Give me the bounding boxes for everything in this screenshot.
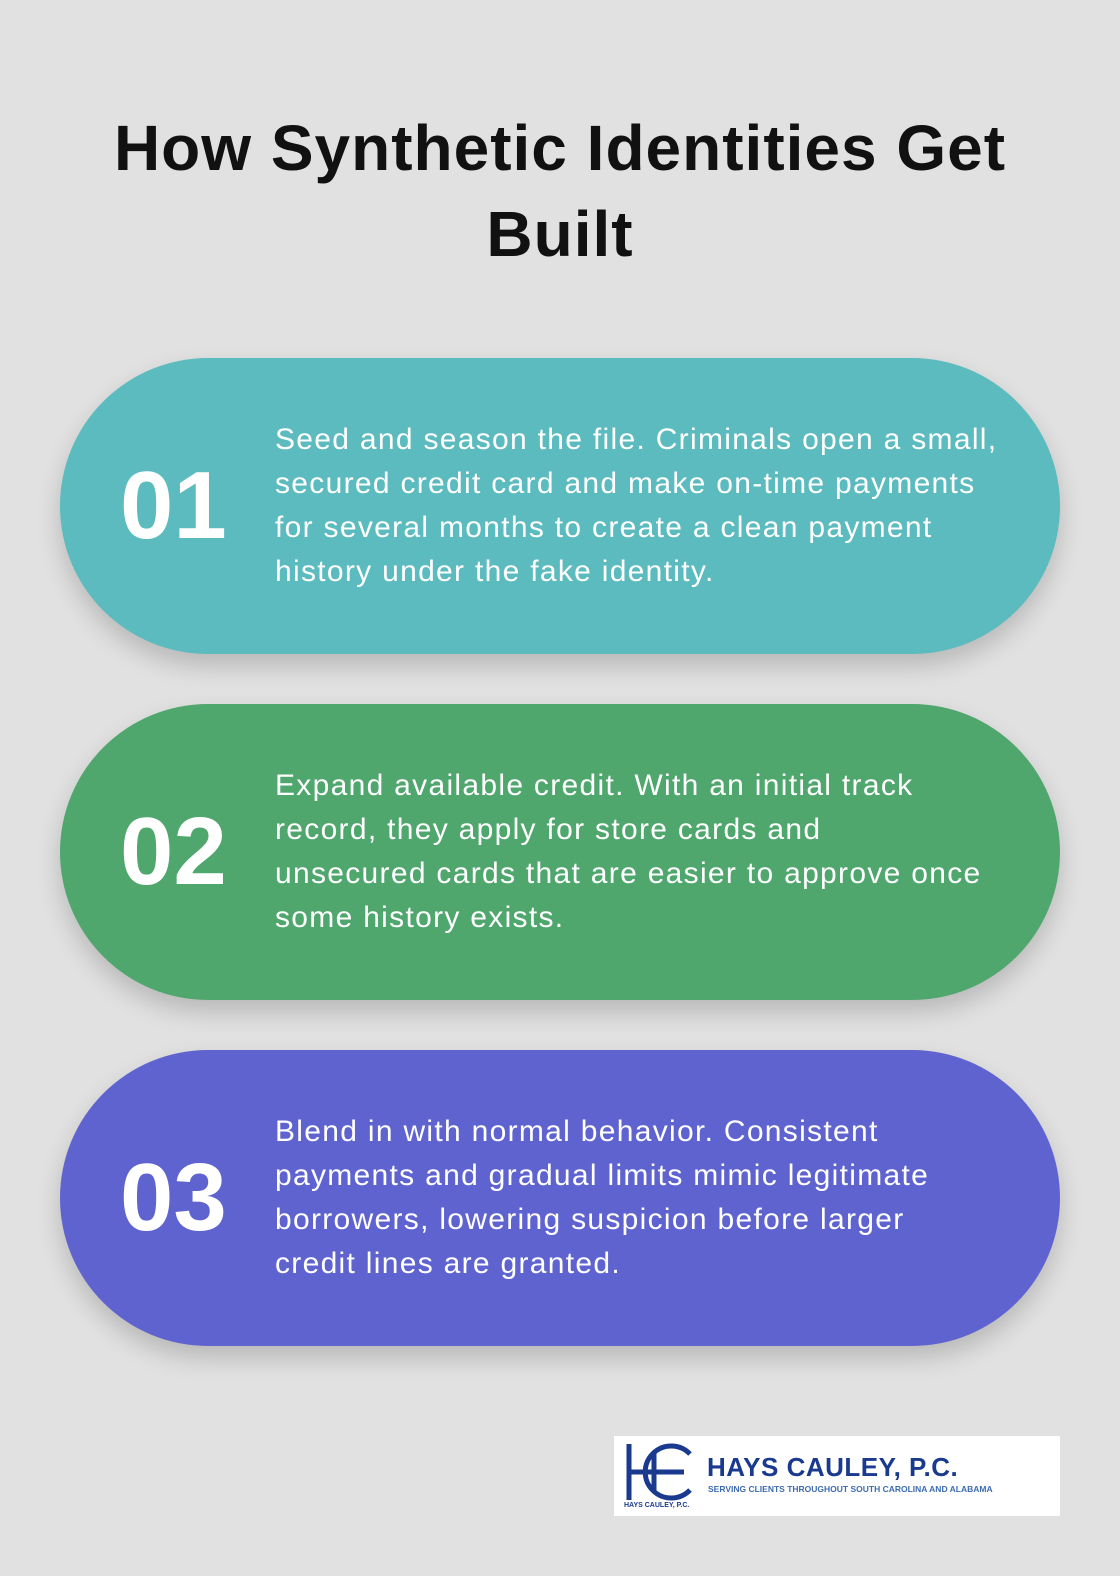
panel: step 02 xyxy=(60,704,1060,1000)
text 03: Blend in with normal behavior. Consistent xyxy=(275,1115,879,1148)
company name: HAYS CAULEY, P.C. xyxy=(707,1452,958,1482)
text 01: for several months to create a clean payment xyxy=(275,511,933,544)
text 02 xyxy=(275,769,982,934)
panel: step 03 xyxy=(60,1050,1060,1346)
text 01: Seed and season the file. Criminals open a small, xyxy=(275,423,997,456)
text 02: Expand available credit. With an initial track xyxy=(275,769,913,802)
logo xyxy=(614,1436,1060,1516)
logo: HAYS CAULEY, P.C. xyxy=(624,1502,689,1509)
title: How Synthetic Identities Get xyxy=(114,112,1006,184)
title: Built xyxy=(486,198,634,270)
number 01: 01 xyxy=(120,452,227,559)
text 01: history under the fake identity. xyxy=(275,555,715,588)
text 03: payments and gradual limits mimic legitimate xyxy=(275,1159,929,1192)
icon: HC monogram xyxy=(626,1444,692,1500)
text 03 xyxy=(275,1115,929,1280)
text 01: secured credit card and make on-time payments xyxy=(275,467,975,500)
text 02: record, they apply for store cards and xyxy=(275,813,821,846)
text 02: some history exists. xyxy=(275,901,564,934)
number 02: 02 xyxy=(120,798,227,905)
text 02: unsecured cards that are easier to approve once xyxy=(275,857,982,890)
panel: step 01 xyxy=(60,358,1060,654)
text 03: borrowers, lowering suspicion before larger xyxy=(275,1203,905,1236)
title xyxy=(114,112,1006,270)
text 01 xyxy=(275,423,997,588)
logo: SERVING CLIENTS THROUGHOUT SOUTH CAROLINA AND ALABAMA xyxy=(708,1484,993,1494)
number 03: 03 xyxy=(120,1144,227,1251)
text 03: credit lines are granted. xyxy=(275,1247,621,1280)
